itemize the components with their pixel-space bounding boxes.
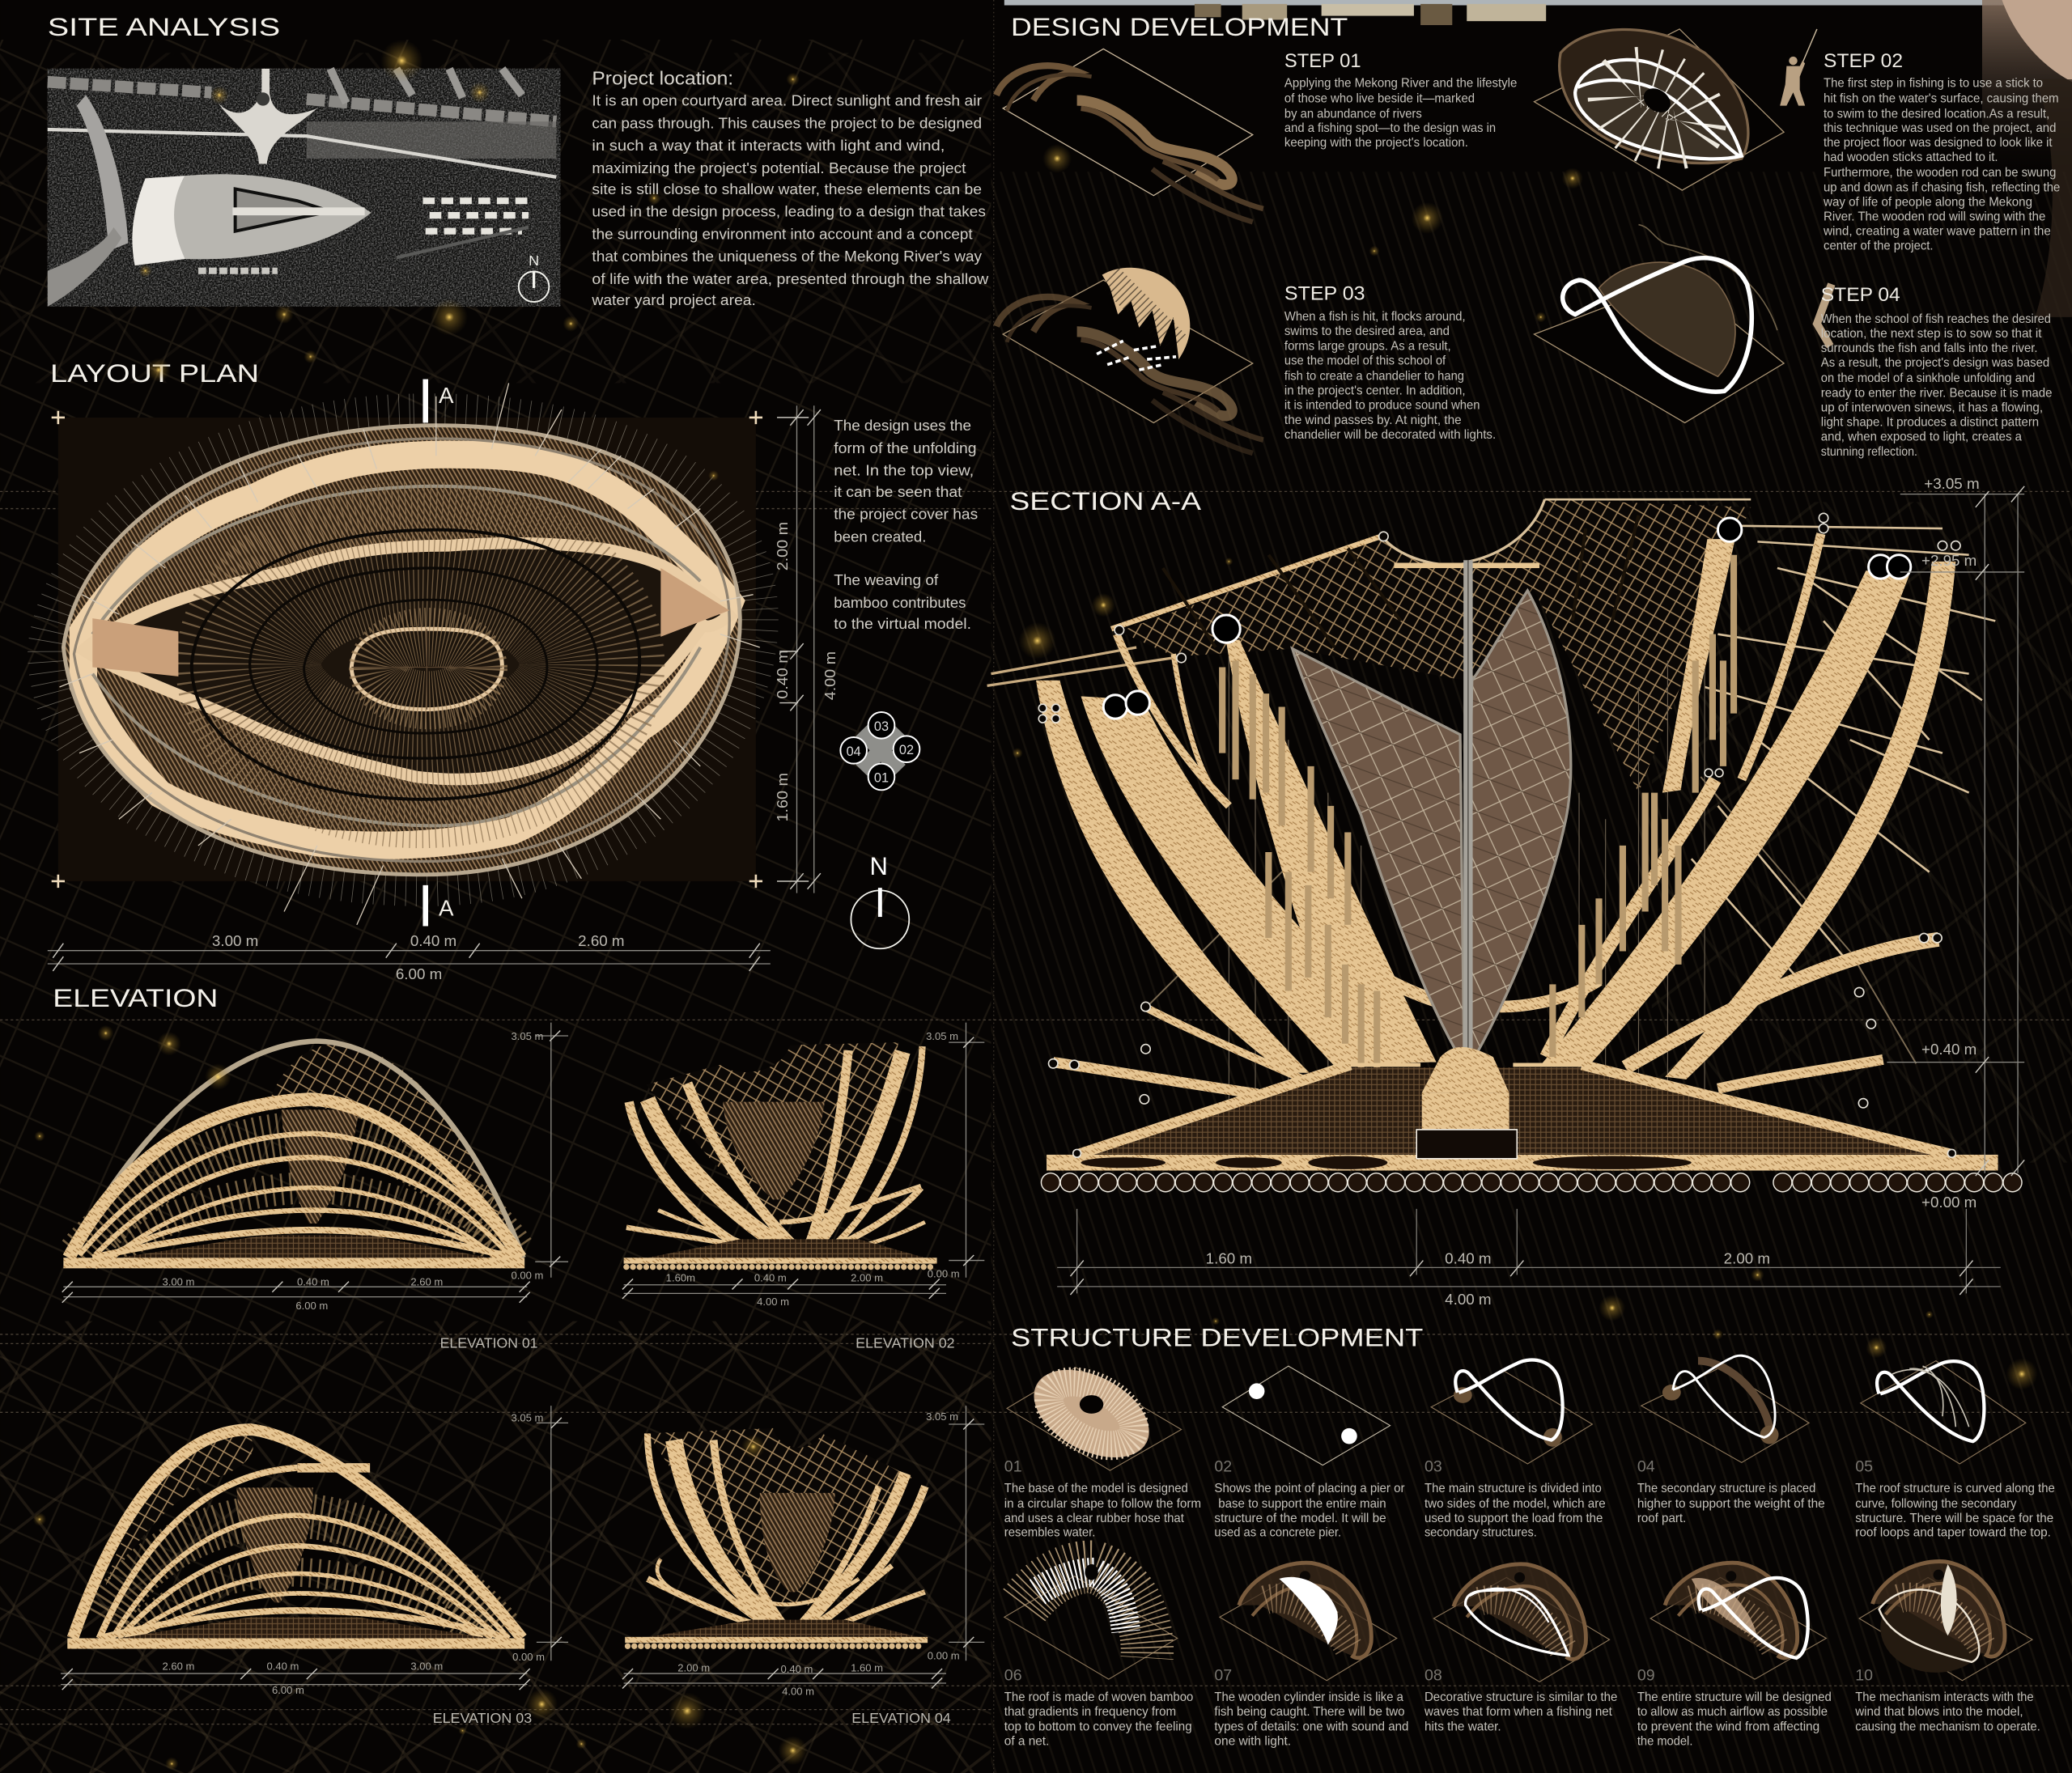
section level dimensions: +3.05 m <box>1924 475 1980 492</box>
panel: layout plan <box>46 359 978 982</box>
elevation 03 dimensions: 2.60 m <box>162 1661 194 1673</box>
step 03 text: the wind passes by. At night, the <box>1284 414 1462 427</box>
step 01: circular base: 01 <box>1004 1458 1022 1476</box>
elevation 02 <box>624 1042 937 1267</box>
step 06: woven roof: top to bottom to convey the feeling <box>1004 1720 1192 1734</box>
step 10: wind mechanism: wind that blows into the model, <box>1854 1705 2023 1719</box>
step 02: pier points: used as a concrete pier. <box>1214 1526 1341 1540</box>
step 01 text: Applying the Mekong River and the lifestyle <box>1284 77 1517 91</box>
small open ring joints <box>1038 513 1960 1157</box>
section level dimensions: +2.95 m <box>1921 552 1976 569</box>
heading: structure development: STRUCTURE DEVELOPMENT <box>1011 1324 1423 1352</box>
step 05: roof structure <box>1855 1361 2055 1540</box>
step 09: entire structure <box>1637 1563 1832 1749</box>
elevation 02 dimensions: 3.05 m <box>926 1030 958 1042</box>
key plan: elevation numbers <box>840 712 919 790</box>
step 02 text: the project floor was designed to look like it <box>1824 136 2053 150</box>
heading: elevation: ELEVATION <box>53 984 218 1012</box>
step 04 text: light shape. It produces a distinct pattern <box>1821 416 2039 430</box>
label: elevation 01: ELEVATION 01 <box>440 1334 538 1351</box>
horizontal dimensions: 3.00 m <box>212 932 258 949</box>
elevation 01 dimensions: 3.00 m <box>162 1276 194 1288</box>
step 06: woven roof <box>1004 1564 1193 1749</box>
step 04: secondary structure: The secondary structure is placed <box>1637 1482 1815 1495</box>
label: elevation 02: ELEVATION 02 <box>856 1334 955 1351</box>
step 05: roof structure: structure. There will be space for the <box>1855 1512 2053 1525</box>
elevation 04 dimensions: 3.05 m <box>926 1410 958 1423</box>
section drawing: bamboo structure <box>987 499 2018 1182</box>
vertical dimensions <box>774 405 839 893</box>
step 08: decorative structure: Decorative structure is similar to the <box>1424 1690 1617 1704</box>
step 01: circular base <box>1004 1352 1201 1540</box>
elevation 04 <box>625 1428 928 1646</box>
elevation 03 dimensions <box>61 1406 568 1696</box>
text: project location: can pass through. This causes the project to be designed <box>592 114 982 131</box>
step 01: circular base: and uses a clear rubber hose that <box>1004 1512 1185 1525</box>
section level dimensions <box>1887 475 2024 1211</box>
horizontal dimensions: 6.00 m <box>396 965 442 982</box>
elevation 01 dimensions: 6.00 m <box>295 1300 328 1312</box>
step 02: pier points: 02 <box>1214 1458 1232 1476</box>
step 04 text: location, the next step is to sow so that it <box>1821 327 2042 341</box>
step 06: woven roof: of a net. <box>1004 1735 1049 1749</box>
step 01 text: STEP 01 <box>1284 50 1361 72</box>
step 09: entire structure: the model. <box>1637 1735 1692 1749</box>
step 06: woven roof: that gradients in frequency from <box>1004 1705 1176 1719</box>
step 03 text: When a fish is hit, it flocks around, <box>1284 310 1466 324</box>
step 06: woven roof: The roof is made of woven bamboo <box>1004 1690 1193 1704</box>
panel: design development <box>996 13 2060 459</box>
step 01 text: by an abundance of rivers <box>1284 107 1422 121</box>
step 03: main structure: two sides of the model, which are <box>1424 1497 1606 1511</box>
step 09: entire structure: to prevent the wind from affecting <box>1637 1720 1819 1734</box>
step 02 text: way of life of people along the Mekong <box>1823 196 2032 210</box>
section width dimensions: 0.40 m <box>1445 1250 1492 1267</box>
label: elevation 04: ELEVATION 04 <box>851 1710 951 1726</box>
step 01 text: of those who live beside it—marked <box>1284 92 1475 106</box>
text: design form: been created. <box>834 528 926 545</box>
section width dimensions: 1.60 m <box>1206 1250 1252 1267</box>
text: design form: it can be seen that <box>834 483 962 500</box>
section level dimensions: +0.00 m <box>1921 1194 1976 1211</box>
elevation 04 dimensions: 0.40 m <box>781 1663 813 1675</box>
elevation 01 dimensions: 0.00 m <box>511 1269 544 1281</box>
step 02 text: had wooden sticks attached to it. <box>1824 151 1998 164</box>
elevation 02 dimensions: 0.00 m <box>928 1268 960 1280</box>
horizontal dimensions: 0.40 m <box>410 932 456 949</box>
black and white joint circles <box>1103 518 1911 719</box>
step 10: wind mechanism <box>1854 1562 2040 1734</box>
step 08: decorative structure: waves that form when a fishing net <box>1424 1705 1613 1719</box>
icon: north arrow: N <box>870 852 888 880</box>
step 08: decorative structure: hits the water. <box>1424 1720 1501 1734</box>
step 09: entire structure: The entire structure will be designed <box>1637 1690 1832 1704</box>
step 09: entire structure: to allow as much airflow as possible <box>1637 1705 1828 1719</box>
text: design form: the project cover has <box>834 506 978 523</box>
brown central leaves <box>1293 591 1571 1075</box>
step 08: decorative structure: 08 <box>1424 1667 1442 1685</box>
plan drawing: woven roof from above <box>46 412 760 888</box>
deck platform <box>1047 1047 1998 1171</box>
step 04 text: ready to enter the river. Because it is made <box>1821 387 2052 401</box>
vertical dimensions: 2.00 m <box>774 522 791 570</box>
step 01: circular base: resembles water. <box>1004 1526 1095 1540</box>
plan spikes <box>59 383 760 925</box>
step 04 text <box>1821 284 2052 459</box>
step 08: decorative structure <box>1424 1564 1617 1734</box>
step 10: wind mechanism: The mechanism interacts with the <box>1855 1690 2034 1704</box>
step 01 drawing: river on a site plate <box>996 49 1263 222</box>
step 03 text: swims to the desired area, and <box>1284 324 1450 338</box>
elevation 03 dimensions: 3.05 m <box>511 1412 544 1424</box>
step 09: entire structure: 09 <box>1637 1667 1655 1685</box>
step 04 text: stunning reflection. <box>1821 445 1917 459</box>
key plan: elevation numbers: 02 <box>899 743 914 757</box>
text: design form: form of the unfolding <box>834 439 977 456</box>
cream bamboo bands <box>1036 534 1955 1094</box>
aerial site photograph <box>48 69 560 307</box>
text: design form: The weaving of <box>834 571 939 588</box>
text: project location: of life with the water area, presented through the shallow <box>592 270 989 287</box>
step 07: wooden cylinders: 07 <box>1214 1667 1232 1685</box>
vertical dimensions: 1.60 m <box>774 773 791 822</box>
key plan: elevation numbers: 04 <box>847 744 861 759</box>
step 02: pier points: Shows the point of placing a pier or <box>1214 1482 1405 1495</box>
text: project location: used in the design process, leading to a design that takes <box>592 203 986 220</box>
step 01: circular base: The base of the model is designed <box>1004 1482 1188 1495</box>
step 02 text: STEP 02 <box>1824 50 1903 72</box>
step 04: secondary structure: 04 <box>1637 1458 1655 1476</box>
step 01 text: and a fishing spot—to the design was in <box>1284 121 1496 135</box>
step 03 text: fish to create a chandelier to hang <box>1284 369 1464 383</box>
section width dimensions <box>1057 1209 2001 1308</box>
step 03: main structure: used to support the load from the <box>1424 1512 1603 1525</box>
plan backing square with corner marks <box>52 411 762 888</box>
step 03 text <box>1284 283 1496 442</box>
step 04 text: As a result, the project's design was based <box>1821 356 2049 370</box>
elevation 03 dimensions: 0.40 m <box>266 1661 299 1673</box>
elevation 01 <box>63 1041 524 1268</box>
floating log row <box>1051 1177 2018 1189</box>
step 02 text: wind, creating a water wave pattern in the <box>1823 225 2051 239</box>
step 02 text: River. The wooden rod will swing with the <box>1824 210 2045 224</box>
icon: north arrow on site photo: N <box>529 252 539 269</box>
text: project location: It is an open courtyard area. Direct sunlight and fresh air <box>592 92 982 109</box>
step 05: roof structure: curve, following the secondary <box>1855 1497 2017 1511</box>
step 03: main structure: secondary structures. <box>1424 1526 1537 1540</box>
step 07: wooden cylinders: one with light. <box>1214 1735 1291 1749</box>
icon: north arrow <box>851 852 909 948</box>
step 01: circular base: in a circular shape to follow the form <box>1004 1497 1201 1511</box>
text: project location: that combines the uniqueness of the Mekong River's way <box>592 248 983 265</box>
step 02 text: to swim to the desired location.As a result, <box>1824 107 2049 121</box>
step 03 text: STEP 03 <box>1284 283 1365 305</box>
panel: site analysis <box>48 13 989 308</box>
vertical dimensions: 0.40 m <box>774 650 791 699</box>
suspended wooden cylinders <box>1222 555 1734 1077</box>
step 02 text <box>1823 50 2060 253</box>
step 03 text: use the model of this school of <box>1284 354 1446 368</box>
section marks A: A <box>439 895 454 920</box>
panel: structure development <box>1004 1324 2055 1749</box>
horizontal dimensions <box>48 932 771 982</box>
icon: north arrow on site photo <box>519 252 549 302</box>
elevation 02 dimensions: 2.00 m <box>851 1272 883 1284</box>
section level dimensions: +0.40 m <box>1921 1041 1976 1058</box>
label: elevation 03: ELEVATION 03 <box>433 1710 532 1726</box>
panel: elevations <box>53 984 984 1726</box>
step 07: wooden cylinders: types of details: one with sound and <box>1214 1720 1408 1734</box>
step 04 text: and, when exposed to light, creates a <box>1821 430 2022 443</box>
step 04: secondary structure: roof part. <box>1637 1512 1686 1525</box>
horizontal dimensions: 2.60 m <box>578 932 625 949</box>
elevation 04 dimensions: 4.00 m <box>782 1686 814 1698</box>
elevation 03 dimensions: 3.00 m <box>410 1661 443 1673</box>
step 02 text: The first step in fishing is to use a stick to <box>1824 77 2043 91</box>
step 03 text: it is intended to produce sound when <box>1284 398 1480 412</box>
step 01 text <box>1284 50 1517 150</box>
heading: design development: DESIGN DEVELOPMENT <box>1011 13 1348 41</box>
step 07: wooden cylinders: fish being caught. There will be two <box>1214 1705 1405 1719</box>
step 05: roof structure: 05 <box>1855 1458 1873 1476</box>
section width dimensions: 4.00 m <box>1445 1291 1492 1308</box>
heading: site analysis: SITE ANALYSIS <box>48 13 280 41</box>
elevation 01 dimensions <box>62 1023 568 1312</box>
text: design form: net. In the top view, <box>834 462 974 479</box>
text: design form: The design uses the <box>834 417 971 434</box>
text: project location: water yard project area. <box>591 291 756 308</box>
elevation 01 dimensions: 3.05 m <box>511 1030 544 1042</box>
elevation 03 dimensions: 0.00 m <box>512 1651 545 1663</box>
step 02: pier points: base to support the entire main <box>1218 1497 1386 1511</box>
elevation 01 dimensions: 0.40 m <box>297 1276 329 1288</box>
step 03 text: in the project's center. In addition, <box>1284 384 1466 397</box>
step 10: wind mechanism: 10 <box>1855 1667 1873 1685</box>
hanging wires <box>1146 634 1916 1163</box>
key plan: elevation numbers: 03 <box>874 719 889 734</box>
step 07: wooden cylinders: The wooden cylinder inside is like a <box>1214 1690 1403 1704</box>
panel: section A-A <box>987 475 2024 1308</box>
elevation 02 dimensions: 1.60m <box>666 1272 695 1284</box>
elevation 02 dimensions <box>622 1023 984 1308</box>
elevation 03 dimensions: 6.00 m <box>272 1684 304 1696</box>
step 05: roof structure: The roof structure is curved along the <box>1855 1482 2055 1495</box>
text: project location: Project location: <box>592 67 733 88</box>
section marks A: A <box>439 383 454 408</box>
text: design form <box>834 417 978 632</box>
step 02 text: up and down as if chasing fish, reflecting the <box>1824 181 2060 195</box>
text: project location: maximizing the project's potential. Because the project <box>592 159 966 176</box>
step 02 text: center of the project. <box>1824 240 1934 253</box>
step 04: secondary structure: higher to support the weight of the <box>1637 1497 1825 1511</box>
elevation 02 dimensions: 4.00 m <box>757 1296 789 1308</box>
elevation 03 <box>67 1430 524 1649</box>
photo strip and sky at the top right <box>1004 0 2072 317</box>
key plan: elevation numbers: 01 <box>874 771 889 786</box>
step 03 text: chandelier will be decorated with lights. <box>1284 428 1496 442</box>
step 02 text: Furthermore, the wooden rod can be swung <box>1824 166 2056 180</box>
vertical dimensions: 4.00 m <box>822 651 839 700</box>
step 03 text: forms large groups. As a result, <box>1284 340 1451 354</box>
text: project location: the surrounding environment into account and a concept <box>592 226 973 243</box>
step 04 text: on the model of a sinkhole unfolding and <box>1821 371 2035 385</box>
central mast and crossbar <box>1394 560 1539 1105</box>
step 03: main structure <box>1424 1360 1606 1540</box>
step 04 text: up of interwoven sinews, it has a flowing, <box>1821 401 2043 415</box>
text: project location: in such a way that it interacts with light and wind, <box>592 137 945 154</box>
text: project location <box>591 67 989 308</box>
text: design form: bamboo contributes <box>834 594 966 611</box>
section marks A <box>422 380 454 926</box>
step 10: wind mechanism: causing the mechanism to operate. <box>1855 1720 2040 1734</box>
step 02: pier points: structure of the model. It will be <box>1214 1512 1386 1525</box>
step 04: secondary structure <box>1637 1355 1825 1525</box>
elevation 04 dimensions: 0.00 m <box>928 1650 960 1662</box>
woven net roof <box>987 499 1995 978</box>
step 02: pier points <box>1214 1366 1405 1540</box>
elevation 02 dimensions: 0.40 m <box>754 1272 787 1284</box>
step 02 text: hit fish on the water's surface, causing them <box>1824 92 2059 106</box>
elevation 04 dimensions: 2.00 m <box>677 1661 710 1673</box>
text: design form: to the virtual model. <box>834 615 971 632</box>
heading: section A-A: SECTION A-A <box>1009 487 1201 515</box>
elevation 04 dimensions: 1.60 m <box>851 1661 883 1673</box>
step 07: wooden cylinders <box>1214 1563 1408 1749</box>
step 03: main structure: The main structure is divided into <box>1424 1482 1602 1495</box>
step 01 text: keeping with the project's location. <box>1284 136 1468 150</box>
step 04 text: STEP 04 <box>1821 284 1900 306</box>
step 02 text: this technique was used on the project, and <box>1824 121 2056 135</box>
step 02 drawing: white frame dome with fisherman <box>1535 29 1817 190</box>
step 03 drawing: fish chandelier over river <box>996 268 1263 453</box>
text: project location: site is still close to shallow water, these elements can be <box>592 180 982 197</box>
step 05: roof structure: roof loops and taper toward the top. <box>1855 1526 2051 1540</box>
step 04 text: surrounds the fish and falls into the river. <box>1821 341 2038 355</box>
section width dimensions: 2.00 m <box>1724 1250 1770 1267</box>
step 04 text: When the school of fish reaches the desired <box>1821 312 2051 326</box>
step 04 drawing: white looped frame <box>1535 225 1832 422</box>
heading: layout plan: LAYOUT PLAN <box>50 359 259 388</box>
step 03: main structure: 03 <box>1424 1458 1442 1476</box>
step 06: woven roof: 06 <box>1004 1667 1022 1685</box>
elevation 01 dimensions: 2.60 m <box>410 1276 443 1288</box>
elevation 04 dimensions <box>622 1406 984 1698</box>
